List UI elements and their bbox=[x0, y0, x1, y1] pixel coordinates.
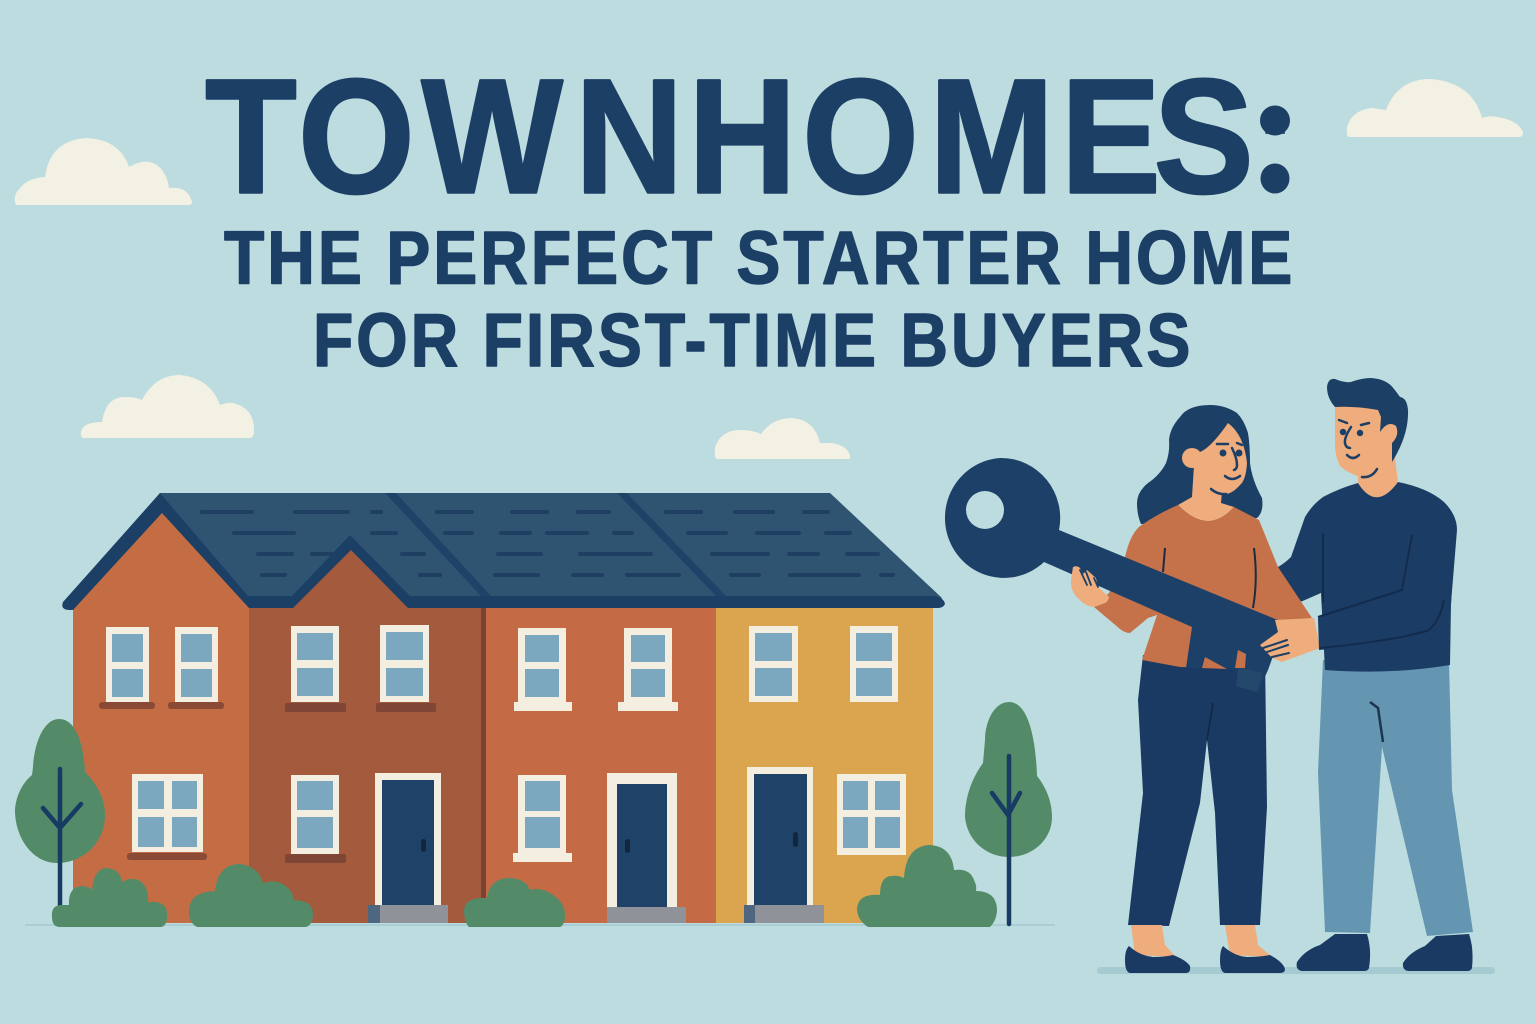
man's sweater bbox=[1278, 482, 1457, 672]
house 1 wall bbox=[73, 513, 249, 923]
cloud: centre bbox=[715, 418, 850, 459]
tree: right bbox=[965, 702, 1052, 924]
roof shingles bbox=[202, 512, 893, 575]
townhouse row bbox=[62, 493, 945, 923]
woman's sweater bbox=[1094, 505, 1312, 668]
upper windows bbox=[99, 625, 898, 712]
woman's sweater fold lines bbox=[1163, 548, 1256, 608]
woman's shoes bbox=[1125, 946, 1285, 973]
title: : bbox=[1252, 54, 1298, 221]
door: house 3 bbox=[607, 773, 686, 923]
downspout bbox=[481, 608, 486, 898]
woman's facial features bbox=[1211, 443, 1242, 494]
house 3 wall bbox=[486, 608, 716, 923]
cloud: middle left bbox=[81, 375, 254, 438]
ground shadow under couple bbox=[1097, 967, 1495, 974]
woman's hair bbox=[1137, 405, 1262, 524]
bush 4 bbox=[857, 845, 997, 927]
door: house 2 bbox=[368, 773, 448, 923]
woman bbox=[1094, 405, 1312, 973]
roof bbox=[62, 493, 945, 610]
house 4 wall bbox=[716, 608, 933, 923]
woman's face bbox=[1194, 423, 1247, 494]
woman's neck bbox=[1178, 465, 1234, 521]
man bbox=[1278, 378, 1473, 971]
door: house 4 bbox=[744, 767, 824, 923]
giant key bbox=[945, 458, 1285, 692]
key fold detail bbox=[1236, 668, 1263, 692]
title: TOWNHOMES bbox=[205, 46, 1254, 228]
man's arm and hand bbox=[1260, 520, 1455, 662]
man's facial features bbox=[1339, 420, 1377, 477]
bush 2 bbox=[189, 864, 313, 927]
woman's ankles bbox=[1131, 925, 1272, 957]
man's shoes bbox=[1297, 934, 1473, 971]
cloud: top right bbox=[1347, 79, 1523, 137]
woman's pants bbox=[1128, 655, 1267, 926]
bush 3 bbox=[464, 878, 565, 927]
woman's hand on key bbox=[1071, 566, 1109, 607]
man's jeans bbox=[1318, 660, 1473, 936]
title: THE PERFECT STARTER HOME bbox=[224, 216, 1292, 299]
man's hair bbox=[1327, 378, 1408, 462]
house 2 wall bbox=[249, 550, 482, 923]
title: FOR FIRST-TIME BUYERS bbox=[313, 298, 1190, 382]
title bbox=[205, 46, 1298, 382]
man's neck and face bbox=[1358, 450, 1398, 497]
sweater showing through key teeth bbox=[1202, 650, 1246, 669]
bush 1 bbox=[52, 868, 167, 927]
cloud: left bbox=[15, 138, 192, 205]
ground line bbox=[25, 924, 1055, 926]
tree: left bbox=[15, 719, 105, 905]
lower windows bbox=[127, 774, 906, 863]
